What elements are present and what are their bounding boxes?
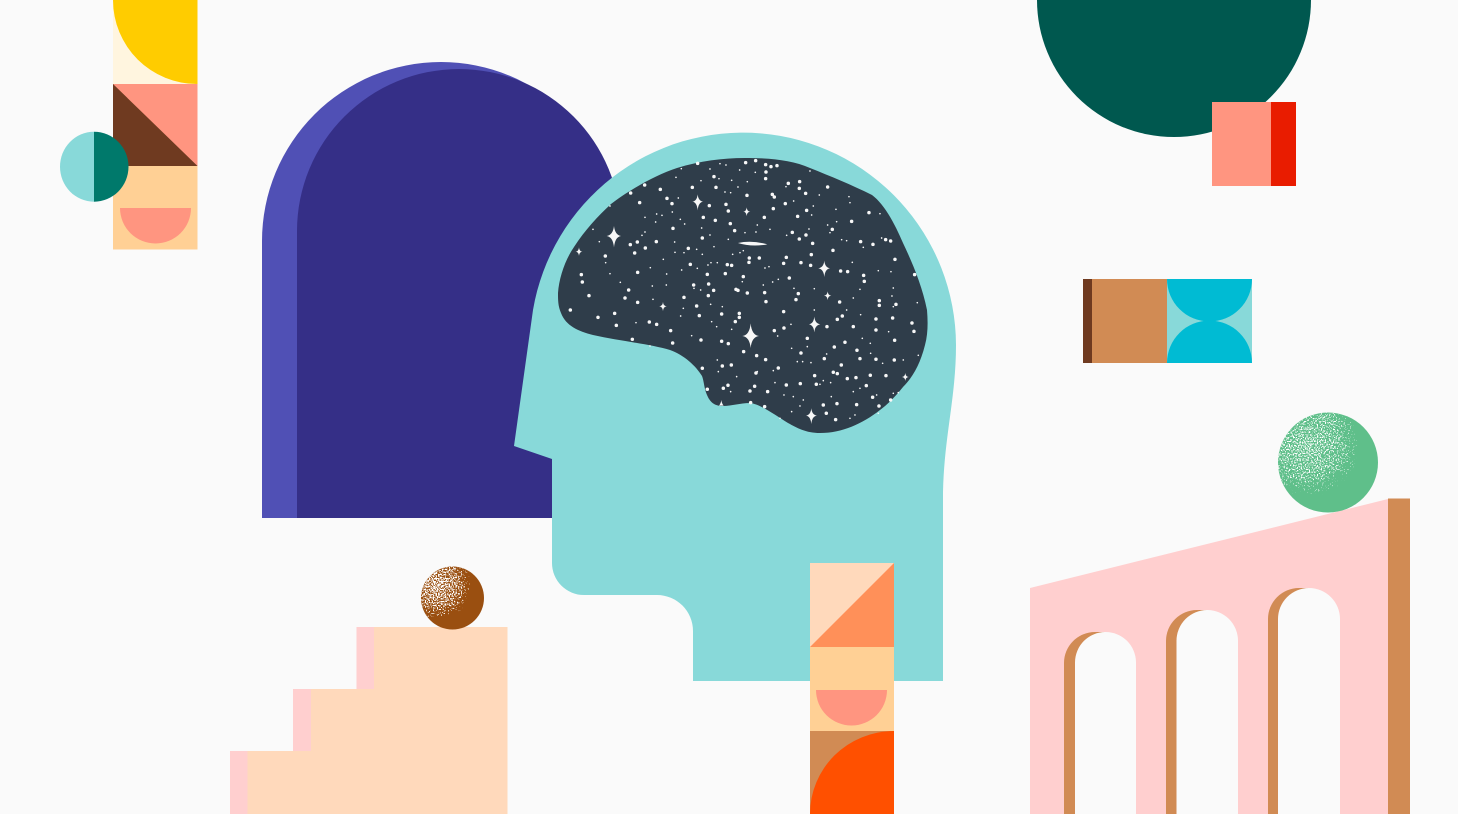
pink arcade with arches xyxy=(1030,498,1410,814)
stars in brain xyxy=(570,161,918,424)
brain xyxy=(558,158,928,433)
two-tone circle xyxy=(60,132,128,202)
head silhouette xyxy=(514,133,956,681)
brown speckled ball xyxy=(421,566,484,630)
stairs xyxy=(230,627,508,814)
green speckled ball xyxy=(1278,412,1378,512)
top-left block column xyxy=(113,0,198,250)
bottom block column xyxy=(810,563,894,814)
coral and red rectangle xyxy=(1212,102,1296,186)
tan and cyan block xyxy=(1083,279,1252,363)
dark green semicircle xyxy=(1037,0,1311,137)
purple arch xyxy=(262,62,621,518)
